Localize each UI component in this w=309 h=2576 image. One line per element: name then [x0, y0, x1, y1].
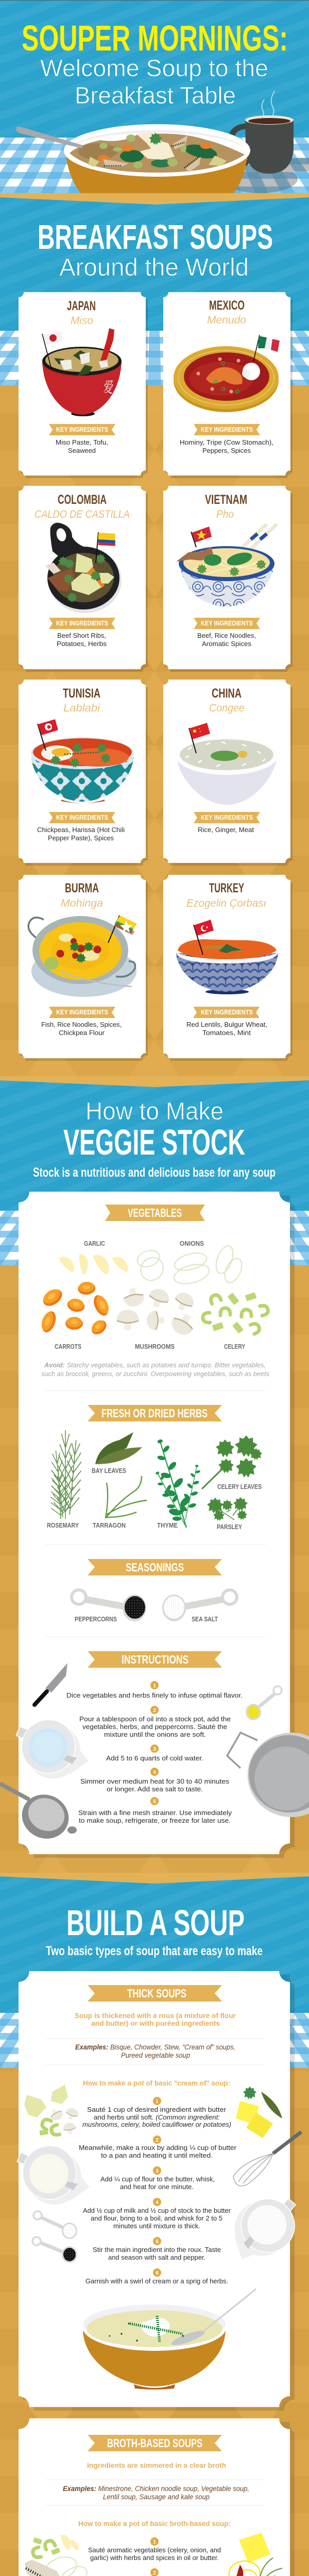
- step 4: minutes until mixture is thick.: [113, 2222, 200, 2230]
- step 4: [80, 1768, 230, 1793]
- card: Tunisia: [19, 680, 148, 866]
- card: Turkey: [163, 875, 293, 1061]
- ingredients: Fish, Rice Noodles, Spices,: [41, 1021, 122, 1028]
- step 3: 3: [153, 1747, 156, 1752]
- icon: spoon of sea salt: [162, 1590, 237, 1621]
- step 1: mushrooms, celery, boiled cauliflower or potatoes): [82, 2121, 231, 2128]
- heading: build a soup: [46, 1903, 263, 1958]
- banner: KEY INGREDIENTS: [201, 814, 253, 821]
- examples: [63, 2484, 249, 2501]
- label: celery leaves: CELERY LEAVES: [217, 1483, 262, 1490]
- country: CHINA: [212, 686, 242, 701]
- step 4: [83, 2198, 231, 2230]
- step 3: [106, 1744, 203, 1762]
- icon: miso bowl: 爱: [102, 375, 115, 397]
- banner: vegetables: VEGETABLES: [128, 1206, 182, 1219]
- icon: knife: [35, 1663, 67, 1705]
- banner: herbs: [88, 1405, 222, 1421]
- step 1: Sauté 1 cup of desired ingredient with butter: [87, 2106, 227, 2113]
- banner: seasonings: [88, 1559, 222, 1575]
- gold panel behind cards: [0, 385, 309, 1076]
- icon: water pitcher: [16, 1720, 89, 1778]
- icon: soup bowl: [16, 124, 250, 193]
- step 2: to a pan and heating it until melted.: [101, 2151, 213, 2159]
- step 5: to make soup, refrigerate, or freeze for later use.: [79, 1817, 231, 1824]
- ingredients: Hominy, Tripe (Cow Stomach),: [180, 438, 273, 446]
- icon: miso bowl: [42, 328, 122, 416]
- step 2: mixture until the onions are soft.: [104, 1731, 206, 1738]
- ingredients: [37, 826, 125, 842]
- gold edge: [0, 1076, 309, 1087]
- soup name: Lablabi: [63, 702, 100, 714]
- card: Mexico: [163, 292, 293, 478]
- banner: [194, 812, 260, 823]
- panel shadows: [23, 1975, 295, 2576]
- ingredients: [41, 1021, 122, 1037]
- soup name: Miso: [71, 315, 93, 327]
- icon: lablabi bowl: [31, 719, 134, 803]
- step 6: 6: [156, 2270, 159, 2276]
- icon: butter and herbs: [236, 2087, 282, 2138]
- labels: carrots, mushrooms, celery: [55, 1343, 246, 1350]
- step 3: Add 5 to 6 quarts of cold water.: [106, 1754, 203, 1762]
- banner: thick soups: THICK SOUPS: [127, 1987, 186, 2000]
- step 2: [79, 2136, 237, 2159]
- banner: [49, 1007, 115, 1018]
- step 4: Simmer over medium heat for 30 to 40 minutes: [80, 1777, 230, 1785]
- step 3: [100, 2166, 215, 2191]
- step 4: and flour, bring to a boil, and whisk for 2 to 5: [91, 2214, 222, 2222]
- icon: lentil soup bowl: [176, 920, 278, 994]
- icon: potatoes, mushrooms and celery: [24, 2084, 80, 2136]
- description: [75, 2011, 236, 2027]
- banner: [194, 618, 260, 629]
- how-to heading: How to make a pot of basic "cream of" soup:: [83, 2079, 230, 2087]
- banner: instructions: INSTRUCTIONS: [122, 1653, 188, 1666]
- subtitle: Breakfast Table: [75, 82, 236, 109]
- step 1: 1: [156, 2099, 159, 2105]
- labels: carrots, mushrooms, celery: CARROTS: [55, 1343, 81, 1350]
- description: Ingredients are simmered in a clear broth: [87, 2461, 226, 2469]
- step 2: 2: [156, 2138, 159, 2143]
- icon: pho bowl: [176, 524, 277, 607]
- examples: Pureed vegetable soup: [121, 2051, 190, 2059]
- step 4: 4: [156, 2200, 159, 2206]
- banner: [49, 618, 115, 629]
- banner: KEY INGREDIENTS: [201, 1008, 253, 1016]
- icon: aromatic vegetables and chicken: [25, 2535, 91, 2576]
- ingredients: [57, 632, 107, 648]
- text: vegetables to avoid: such as broccoli, greens, or zucchini. Overpowering vegetables, such as beets: [41, 1370, 269, 1378]
- labels: peppercorns, sea salt: [75, 1616, 218, 1623]
- icon: tarragon: [106, 1476, 147, 1518]
- tablecloth behind soup panels: [0, 2013, 309, 2069]
- step 3: Add ¼ cup of flour to the butter, whisk,: [100, 2175, 215, 2183]
- examples: Examples: Minestrone, Chicken noodle soup, Vegetable soup,: [63, 2484, 249, 2493]
- icon: thick soup bowl: [83, 2289, 256, 2389]
- card: Colombia: [19, 486, 148, 672]
- step 5: Stir the main ingredient into the roux. Taste: [93, 2246, 221, 2253]
- step 2: 2: [153, 1708, 156, 1714]
- labels: peppercorns, sea salt: SEA SALT: [192, 1616, 218, 1623]
- label: parsley: PARSLEY: [217, 1523, 243, 1531]
- icon: carrots: [39, 1281, 112, 1337]
- banner: seasonings: SEASONINGS: [126, 1561, 184, 1574]
- description: and butter) or with puréed ingredients: [91, 2019, 220, 2027]
- banner: thick soups: [88, 1985, 222, 2002]
- panel: thick soups: [17, 1971, 301, 2407]
- ingredients: [56, 438, 108, 454]
- icon: flour pitcher: [17, 2146, 90, 2205]
- panel shadow: [23, 1195, 295, 1858]
- label: onions: ONIONS: [180, 1240, 204, 1247]
- gold panel behind stock card: [0, 1265, 309, 1873]
- card: Japan: [19, 292, 148, 478]
- step 2: 2: [153, 2570, 156, 2576]
- icon: onion rings: [135, 1244, 245, 1287]
- step 6: Garnish with a swirl of cream or a sprig of herbs.: [85, 2277, 228, 2285]
- label: bay leaves: BAY LEAVES: [92, 1467, 126, 1475]
- soup name: Congee: [209, 702, 245, 714]
- icon: menudo bowl: [174, 335, 280, 412]
- icon: milk pitcher: [225, 2185, 303, 2272]
- icon: spoon of oil: [246, 1686, 282, 1720]
- icon: black pan: [45, 523, 122, 613]
- country: TURKEY: [209, 881, 244, 895]
- banner: KEY INGREDIENTS: [56, 619, 108, 627]
- icon: mushrooms: [116, 1286, 198, 1338]
- country: VIETNAM: [205, 493, 247, 507]
- table edge: [0, 193, 309, 205]
- step 4: 4: [153, 1770, 156, 1775]
- subtitle: Welcome Soup to the: [40, 55, 268, 81]
- banner: KEY INGREDIENTS: [56, 1008, 108, 1016]
- text: vegetables to avoid: Avoid: Starchy vegetables, such as potatoes and turnips. Bitter vegetables,: [44, 1361, 266, 1369]
- ingredients: [186, 1021, 267, 1037]
- examples: Examples: Bisque, Chowder, Stew, “Cream of” soups,: [75, 2043, 235, 2051]
- step 6: [85, 2268, 228, 2285]
- ingredients: [180, 438, 273, 454]
- banner: broth-based soups: [88, 2435, 222, 2451]
- ingredients: Miso Paste, Tofu,: [56, 438, 108, 446]
- step 2: Pour a tablespoon of oil into a stock pot, add the: [79, 1715, 231, 1723]
- step 2: [96, 2568, 213, 2576]
- banner: [193, 1007, 260, 1018]
- labels: carrots, mushrooms, celery: CELERY: [224, 1343, 246, 1350]
- banner: KEY INGREDIENTS: [56, 426, 108, 433]
- step 4: or longer. Add sea salt to taste.: [107, 1785, 203, 1793]
- label: garlic: GARLIC: [84, 1240, 105, 1247]
- step 5: 5: [153, 1799, 156, 1805]
- banner: [194, 424, 260, 435]
- step 5: [78, 1797, 232, 1824]
- step 1: [82, 2097, 231, 2128]
- soup name: Menudo: [207, 314, 246, 326]
- ingredients: Beef, Rice Noodles,: [197, 632, 256, 639]
- icon: whisk: [233, 2132, 301, 2186]
- labels: peppercorns, sea salt: PEPPERCORNS: [75, 1616, 117, 1623]
- icon: strainer: [0, 1784, 77, 1846]
- ingredients: Beef Short Ribs,: [57, 632, 106, 639]
- ingredients: Tomatoes, Mint: [202, 1029, 251, 1037]
- card: Burma: [19, 875, 148, 1061]
- icon: bay leaves: [95, 1432, 142, 1464]
- country: MEXICO: [209, 298, 245, 313]
- country: COLOMBIA: [58, 493, 107, 507]
- icon: rosemary: [48, 1430, 84, 1519]
- step 2: vegetables, herbs, and peppercorns. Sauté the: [82, 1723, 227, 1731]
- card: Vietnam: [163, 486, 293, 672]
- icon: spoon of salt: [33, 2211, 77, 2239]
- tablecloth behind cards: [0, 331, 309, 386]
- step 1: garlic) with herbs and spices in oil or butter.: [90, 2554, 219, 2562]
- icon: coffee mug: [231, 91, 294, 174]
- ingredients: Potatoes, Herbs: [57, 640, 107, 648]
- step 3: 3: [156, 2168, 159, 2174]
- step 1: and herbs until soft. (Common ingredient:: [94, 2113, 220, 2121]
- icon: congee bowl: [176, 723, 278, 805]
- icon: spoon of peppercorns: [72, 1590, 146, 1621]
- ingredients: Peppers, Spices: [202, 447, 251, 454]
- banner: herbs: FRESH OR DRIED HERBS: [101, 1406, 208, 1420]
- banner: KEY INGREDIENTS: [56, 814, 108, 821]
- ingredients: [197, 632, 256, 648]
- gold edge: [0, 1873, 309, 1884]
- soup name: Ezogelin Çorbası: [186, 897, 266, 909]
- banner: KEY INGREDIENTS: [201, 426, 253, 433]
- step 1: Dice vegetables and herbs finely to infuse optimal flavor.: [66, 1691, 243, 1699]
- label: rosemary: ROSEMARY: [47, 1522, 79, 1529]
- icon: spoon of pepper: [32, 2237, 77, 2263]
- panel: broth-based soups: [8, 2418, 290, 2576]
- ingredients: Pepper Paste), Spices: [48, 834, 114, 842]
- step 2: Meanwhile, make a roux by adding ¼ cup of butter: [79, 2144, 237, 2151]
- heading: breakfast soups: [38, 218, 273, 281]
- country: BURMA: [65, 881, 99, 895]
- banner: KEY INGREDIENTS: [201, 619, 253, 627]
- banner: broth-based soups: BROTH-BASED SOUPS: [107, 2436, 202, 2450]
- country: TUNISIA: [63, 686, 100, 701]
- ingredients: Aromatic Spices: [202, 640, 252, 648]
- header tablecloth: [0, 138, 309, 193]
- text: vegetables to avoid: [41, 1361, 269, 1378]
- country: JAPAN: [67, 299, 96, 313]
- ingredients: Seaweed: [68, 447, 96, 454]
- label: tarragon: TARRAGON: [93, 1522, 126, 1529]
- ingredients: Rice, Ginger, Meat: [198, 826, 254, 834]
- icon: butter, oil, chili and tarragon: [228, 2533, 282, 2576]
- step 1: 1: [153, 2539, 156, 2545]
- examples: [75, 2043, 235, 2059]
- subtitle: [40, 55, 268, 109]
- description: Soup is thickened with a roux (a mixture of flour: [75, 2011, 236, 2020]
- step 5: and season with salt and pepper.: [108, 2253, 205, 2261]
- panel: veggie stock: [19, 1192, 290, 1854]
- gold panel behind soup cards: [0, 2068, 309, 2576]
- step 1: Sauté aromatic vegetables (celery, onion, and: [88, 2546, 221, 2554]
- icon: mohinga pan: [28, 916, 137, 997]
- step 5: [93, 2237, 221, 2261]
- heading: veggie stock: [33, 1098, 276, 1180]
- mug shadow on tablecloth: [222, 158, 309, 193]
- icon: thyme: [147, 1436, 205, 1532]
- step 1: 1: [153, 1683, 156, 1689]
- step 5: 5: [156, 2239, 159, 2245]
- banner: vegetables: [105, 1205, 205, 1221]
- icon: garlic cloves: [58, 1253, 130, 1276]
- card: China: [163, 680, 293, 866]
- tablecloth behind stock panel: [0, 1211, 309, 1266]
- step 2: [79, 1706, 231, 1738]
- soup name: Pho: [216, 509, 234, 520]
- ingredients: Red Lentils, Bulgur Wheat,: [186, 1021, 267, 1028]
- heading: veggie stock: How to Make: [85, 1098, 224, 1125]
- icon: celery leaves: [202, 1435, 262, 1489]
- icon: parsley: [207, 1497, 248, 1521]
- label: thyme: THYME: [157, 1522, 178, 1529]
- soup name: Mohinga: [61, 897, 103, 909]
- step 3: and heat for one minute.: [120, 2183, 194, 2191]
- banner: instructions: [88, 1651, 222, 1668]
- step 1: [66, 1681, 243, 1699]
- ingredients: Chickpeas, Harissa (Hot Chili: [37, 826, 125, 834]
- labels: carrots, mushrooms, celery: MUSHROOMS: [135, 1343, 175, 1350]
- examples: Lentil soup, Sausage and kale soup: [103, 2493, 210, 2501]
- banner: [49, 424, 115, 435]
- how-to heading: How to make a pot of basic broth-based soup:: [78, 2519, 231, 2528]
- step 1: [88, 2537, 221, 2562]
- banner: [49, 812, 115, 823]
- heading: breakfast soups: Around the World: [59, 254, 249, 281]
- icon: celery pieces: [203, 1292, 269, 1334]
- soup name: CALDO DE CASTILLA: [35, 509, 130, 520]
- step 5: Strain with a fine mesh strainer. Use immediately: [78, 1809, 232, 1817]
- step 4: Add ½ cup of milk and ½ cup of stock to the butter: [83, 2207, 231, 2214]
- icon: stock pot: [227, 1733, 309, 1817]
- ingredients: Chickpea Flour: [59, 1029, 105, 1037]
